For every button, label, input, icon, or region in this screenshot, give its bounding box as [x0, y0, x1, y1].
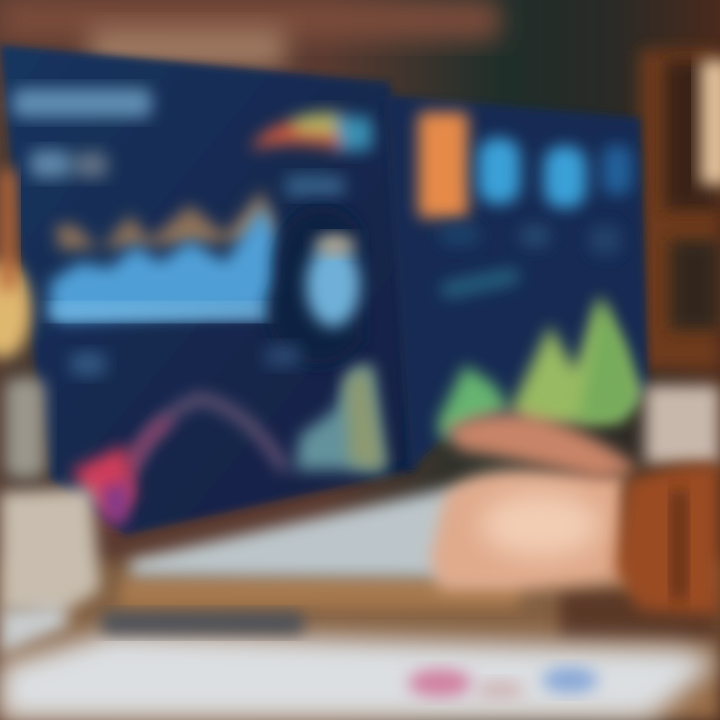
pen [100, 612, 305, 634]
table surface [0, 560, 720, 720]
rainbow gauge [250, 112, 372, 152]
right side white cuff background [645, 385, 720, 465]
teal and green area chart [295, 365, 385, 470]
green area chart [438, 295, 640, 440]
small metric [70, 352, 106, 376]
area chart: blue with orange peaks [50, 190, 278, 322]
colored marks on paper [408, 669, 472, 697]
orange sleeve [615, 464, 720, 615]
bookshelf on the right [640, 50, 720, 370]
orange card [418, 112, 468, 218]
stat block [30, 150, 108, 178]
blurred middle lines [439, 225, 620, 299]
arc line chart [130, 398, 285, 470]
laptop base [130, 490, 520, 578]
mug at lower left [0, 488, 100, 615]
heading: blurred title block [12, 88, 152, 118]
donut chart [266, 206, 362, 364]
lamp glow at left [0, 170, 45, 478]
panel: right dashboard screen [385, 95, 648, 470]
hand [430, 413, 640, 590]
pink bar on the lower left [72, 445, 135, 525]
blue cards [478, 138, 632, 208]
panel: left dashboard screen [0, 45, 415, 535]
label under gauge [285, 175, 345, 197]
sheet of paper on table [0, 605, 720, 720]
